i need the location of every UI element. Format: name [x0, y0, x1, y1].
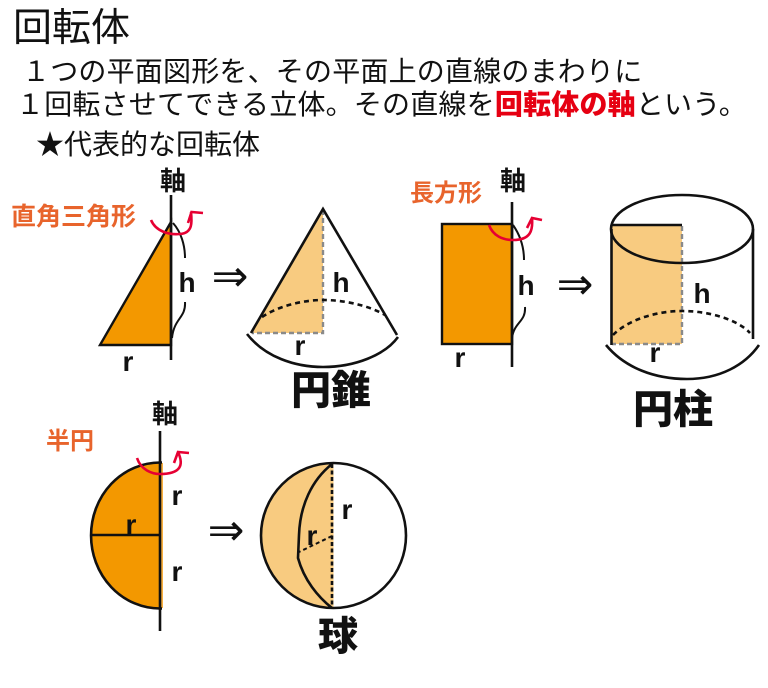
sphere: r — [342, 494, 353, 525]
semicircle shape — [91, 462, 163, 608]
cone: h — [332, 267, 350, 298]
label: rectangle: 長方形 — [410, 173, 482, 208]
right triangle shape — [100, 222, 171, 345]
cylinder: h — [693, 278, 711, 309]
name: cylinder: 円柱 — [633, 377, 713, 435]
radius labels: r — [172, 556, 183, 587]
definition text: １回転させてできる立体。その直線を回転体の軸という。 — [16, 83, 747, 123]
panel: right triangle to cone — [11, 161, 398, 416]
height brace — [512, 225, 525, 338]
radius label: r — [455, 342, 466, 373]
axis line — [159, 431, 161, 631]
axis label: 軸 — [152, 394, 178, 431]
radius labels: r — [172, 480, 183, 511]
radius labels — [126, 480, 183, 587]
axis line — [511, 202, 513, 367]
cone: r — [295, 330, 306, 361]
rotation arrow — [137, 452, 189, 474]
rectangle shape — [442, 224, 512, 344]
arrow: ⇒ — [212, 251, 248, 302]
label: right triangle: 直角三角形 — [11, 197, 136, 233]
panel: semicircle to sphere — [46, 394, 406, 662]
cylinder — [606, 195, 759, 379]
cone — [247, 209, 398, 367]
name: sphere: 球 — [318, 604, 358, 662]
axis label: 軸 — [160, 161, 186, 198]
label: semicircle: 半円 — [46, 421, 94, 456]
sphere — [261, 463, 406, 608]
axis label: 軸 — [500, 161, 526, 198]
arrow: ⇒ — [208, 505, 244, 556]
radius label: r — [123, 346, 134, 377]
axis line — [170, 195, 172, 360]
height brace — [172, 223, 185, 338]
definition text: １つの平面図形を、その平面上の直線のまわりに — [22, 50, 642, 90]
subheading: ★代表的な回転体 — [36, 123, 260, 163]
height label: h — [517, 270, 535, 301]
height label: h — [178, 267, 196, 298]
radius labels: r — [126, 509, 137, 540]
definition text — [16, 50, 747, 123]
name: cone: 円錐 — [291, 358, 371, 416]
rotation arrow — [151, 212, 203, 234]
panel: rectangle to cylinder — [410, 161, 759, 435]
sphere: r — [307, 520, 318, 551]
arrow: ⇒ — [557, 259, 593, 310]
cylinder: r — [650, 337, 661, 368]
rotation arrow — [489, 218, 542, 240]
